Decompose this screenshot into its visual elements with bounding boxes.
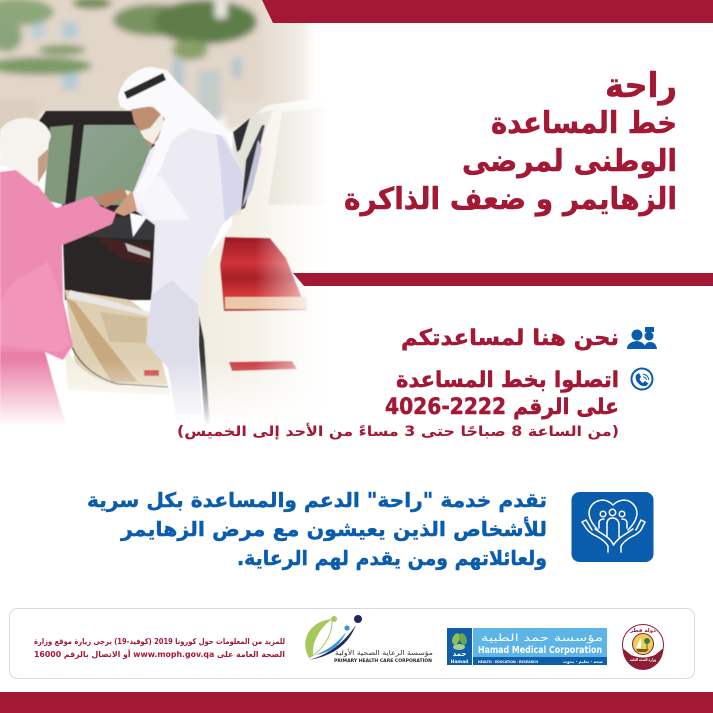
text: call the helpline: اتصلوا بخط المساعدة (396, 368, 619, 393)
icon: doctor and nurse (627, 327, 657, 349)
logo: Hamad Medical Corporation: HEALTH · EDUCATION · RESEARCH (478, 660, 538, 664)
logo: Primary Health Care Corporation: PRIMARY HEALTH CARE CORPORATION (334, 658, 432, 664)
bottom maroon band (0, 692, 713, 713)
fade overlays (258, 14, 330, 381)
text: service description: ولعائلاتهم ومن يقدم لهم الرعاية. (237, 546, 547, 570)
title: راحة (605, 66, 677, 106)
text: service description: للأشخاص الذين يعيشون مع مرض الزهايمر (120, 516, 547, 541)
title: الوطنى لمرضى (462, 144, 677, 179)
text: opening hours: (من الساعة 8 صباحًا حتى 3 مساءً من الأحد إلى الخميس) (177, 423, 619, 440)
text: footer contact note (34, 637, 285, 659)
photo: woman helping elderly man out of a car (0, 0, 345, 430)
car body (198, 100, 316, 424)
text: footer contact note: للمزيد من المعلومات حول كورونا 2019 (كوفيد-19) يرجى زيارة موقع وزارة (34, 637, 285, 646)
title: الزهايمر و ضعف الذاكرة (344, 182, 677, 217)
logo: Hamad Medical Corporation: Hamad Medical Corporation (478, 645, 602, 656)
logo: Ministry of Public Health (622, 624, 664, 670)
text: service description (87, 488, 547, 570)
woman in pink (0, 118, 137, 425)
logo: Hamad Medical Corporation: مؤسسة حمد الطبية (481, 633, 603, 644)
car door (39, 111, 170, 395)
logo: Hamad Medical Corporation: Hamad (451, 659, 468, 665)
text: phone number: على الرقم 2222-4026 (385, 395, 619, 420)
man in white thobe (118, 67, 243, 415)
text: footer contact note: الصحة العامة على www.moph.gov.qa أو الاتصال بالرقم 16000 (34, 649, 285, 659)
logo: Ministry of Public Health: دولة قطر (629, 628, 656, 634)
logo: Hamad Medical Corporation (447, 628, 607, 665)
icon: phone in circle (632, 368, 652, 390)
title: خط المساعدة (491, 106, 677, 141)
logo: Hamad Medical Corporation: حمد (453, 650, 466, 658)
middle maroon ribbon (293, 273, 713, 286)
logo: Primary Health Care Corporation: مؤسسة الرعاية الصحية الأولية (335, 648, 433, 657)
logo: Hamad Medical Corporation: صحة · تعليم · بحوث (563, 659, 603, 664)
logo: Ministry of Public Health: وزارة الصحة العامة (630, 657, 656, 662)
text: service description: تقدم خدمة "راحة" الدعم والمساعدة بكل سرية (87, 488, 547, 512)
top maroon ribbon (262, 0, 713, 23)
logo: Primary Health Care Corporation (305, 615, 433, 664)
text: we are here to help: نحن هنا لمساعدتكم (401, 326, 619, 351)
icon: hands holding a family in a heart (572, 492, 654, 562)
title (344, 66, 677, 217)
footer panel (10, 608, 694, 678)
